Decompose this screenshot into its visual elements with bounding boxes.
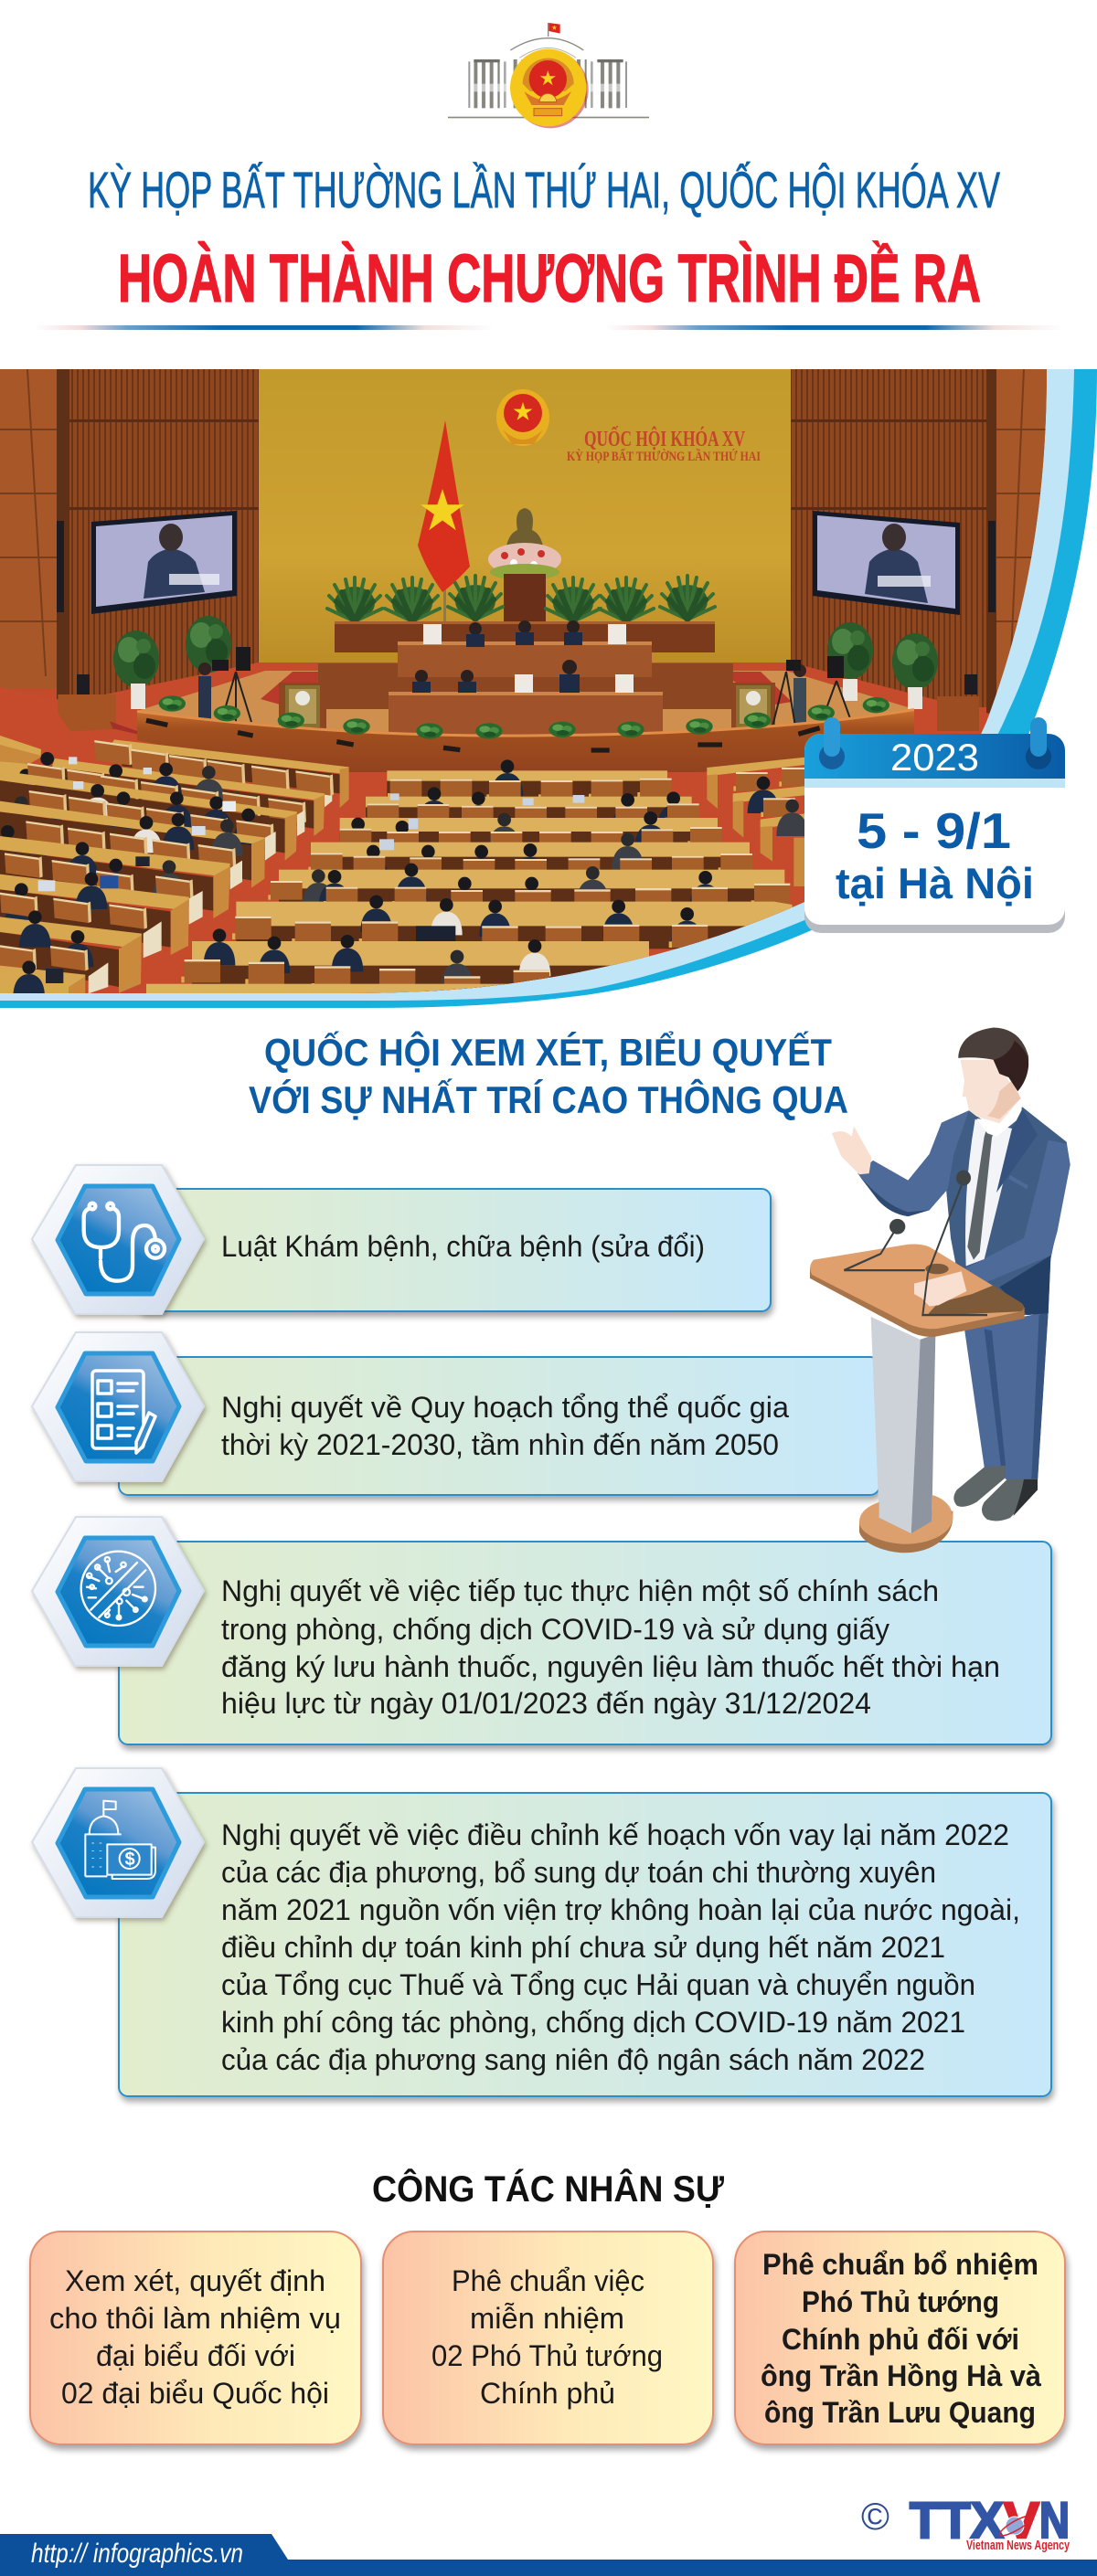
panel: item 1 health law	[32, 1165, 771, 1314]
text: box 2: miễn nhiệm	[470, 2302, 624, 2335]
text: item 2	[221, 1391, 789, 1461]
text: item 4: của Tổng cục Thuế và Tổng cục Hải quan và chuyển nguồn	[221, 1968, 975, 2001]
podium base	[859, 1495, 953, 1553]
footer: website bar	[0, 2534, 1097, 2576]
text: item 4: Nghị quyết về việc điều chỉnh kế hoạch vốn vay lại năm 2022	[221, 1818, 1009, 1851]
heading: National Assembly voted: VỚI SỰ NHẤT TRÍ CAO THÔNG QUA	[249, 1077, 848, 1121]
text: box 1: 02 đại biểu Quốc hội	[61, 2377, 329, 2410]
text: item 2: thời kỳ 2021-2030, tầm nhìn đến năm 2050	[221, 1428, 779, 1461]
text: box 2: Chính phủ	[480, 2377, 615, 2410]
logo: National Assembly building and emblem	[448, 23, 649, 128]
wall panels	[0, 369, 57, 689]
logo: TTXVN Vietnam News Agency: ©	[861, 2495, 889, 2538]
lecterns	[279, 683, 775, 730]
icon: flag on the dome	[548, 23, 560, 37]
icon: stethoscope in hexagon	[32, 1165, 204, 1314]
icon: national emblem	[510, 49, 589, 128]
panel: item 3 COVID-19 resolution	[32, 1517, 1051, 1744]
stage floor	[139, 671, 914, 732]
icon: building and money in hexagon	[32, 1768, 204, 1917]
palms	[327, 576, 715, 621]
illustration: speaker at podium	[810, 1028, 1070, 1553]
panel: personnel box 2	[383, 2231, 713, 2444]
text: box 3: Phó Thủ tướng	[802, 2285, 999, 2318]
text: item 3: trong phòng, chống dịch COVID-19 và sử dụng giấy	[221, 1613, 889, 1646]
calendar rings	[819, 717, 1051, 769]
man's legs and shoes	[953, 1311, 1049, 1521]
text: box 3: Chính phủ đối với	[782, 2323, 1019, 2356]
text: box 3: ông Trần Lưu Quang	[764, 2396, 1036, 2429]
man's raised hand	[832, 1126, 871, 1174]
logo: TTXVN Vietnam News Agency: TTX	[910, 2491, 1004, 2549]
microphones	[844, 1171, 987, 1315]
heading: National Assembly voted: QUỐC HỘI XEM XÉT, BIỂU QUYẾT	[264, 1030, 832, 1074]
text: item 4: năm 2021 nguồn vốn viện trợ không hoàn lại của nước ngoài,	[221, 1893, 1020, 1926]
logo: TTXVN Vietnam News Agency: N	[1039, 2491, 1070, 2549]
text: item 3: hiệu lực từ ngày 01/01/2023 đến ngày 31/12/2024	[221, 1687, 871, 1720]
logo: TTXVN Vietnam News Agency: V	[1004, 2491, 1039, 2549]
text: box 1: đại biểu đối với	[96, 2339, 295, 2372]
right seating block	[707, 757, 814, 886]
text: item 1: Luật Khám bệnh, chữa bệnh (sửa đổi)	[221, 1230, 705, 1263]
screens	[91, 511, 960, 615]
place: tại Hà Nội	[836, 859, 1034, 907]
text: item 4: của các địa phương, bổ sung dự toán chi thường xuyên	[221, 1856, 936, 1889]
photo: National Assembly hall: KỲ HỌP BẤT THƯỜNG LẦN THỨ HAI	[567, 449, 761, 464]
icon: virus prohibited in hexagon	[32, 1517, 204, 1666]
panel: item 2 national master plan	[32, 1332, 879, 1495]
podium top	[810, 1245, 1025, 1337]
text: box 2	[431, 2264, 663, 2410]
text: box 3: ông Trần Hồng Hà và	[761, 2359, 1041, 2392]
panel: curved blue frame around hall photo	[0, 369, 1097, 1008]
calendar header	[804, 734, 1065, 779]
text: item 3: đăng ký lưu hành thuốc, nguyên liệu làm thuốc hết thời hạn	[221, 1650, 1000, 1683]
text: box 2: Phê chuẩn việc	[452, 2264, 644, 2297]
panel: personnel box 3	[735, 2231, 1065, 2444]
plants and vases	[113, 616, 938, 709]
man's torso	[857, 1106, 1070, 1315]
photo: National Assembly hall	[0, 369, 1051, 1009]
text: box 2: 02 Phó Thủ tướng	[431, 2339, 663, 2372]
centre seating block	[146, 759, 793, 1000]
bust and flowers	[488, 508, 561, 621]
panel: item 4 budget resolution	[32, 1768, 1051, 2096]
footer: website bar: http:// infographics.vn	[31, 2539, 243, 2569]
logo: TTXVN Vietnam News Agency	[861, 2491, 1070, 2553]
year: 2023	[890, 736, 979, 779]
heading: personnel work: CÔNG TÁC NHÂN SỰ	[372, 2168, 725, 2210]
text: item 2: Nghị quyết về Quy hoạch tổng thể quốc gia	[221, 1391, 789, 1424]
text: box 1	[49, 2264, 341, 2410]
seating and stage front	[0, 694, 914, 1000]
podium column	[871, 1317, 935, 1533]
man's hand on podium	[914, 1271, 966, 1307]
left seating block	[0, 736, 349, 998]
text: box 1: Xem xét, quyết định	[65, 2264, 325, 2297]
heading: National Assembly voted	[249, 1030, 848, 1121]
text: box 1: cho thôi làm nhiệm vụ	[49, 2302, 341, 2335]
text: item 4: của các địa phương sang niên độ ngân sách năm 2022	[221, 2043, 925, 2076]
carpet	[0, 663, 1051, 1005]
presidium desks	[318, 620, 733, 736]
wall text: QUỐC HỘI KHÓA XV	[584, 427, 745, 451]
wall emblem	[496, 389, 549, 446]
dates: 5 - 9/1	[857, 802, 1011, 859]
text: item 4: điều chỉnh dự toán kinh phí chưa sử dụng hết năm 2021	[221, 1931, 945, 1964]
text: box 3: Phê chuẩn bổ nhiệm	[762, 2248, 1038, 2281]
panel: personnel box 1	[30, 2231, 361, 2444]
flag	[418, 420, 470, 621]
calendar: date and place	[804, 717, 1065, 933]
text: item 4: kinh phí công tác phòng, chống dịch COVID-19 năm 2021	[221, 2006, 965, 2039]
text: item 3	[221, 1574, 1000, 1720]
icon: checklist in hexagon	[32, 1332, 204, 1481]
text: item 4	[221, 1818, 1020, 2076]
man's head	[958, 1028, 1028, 1123]
icon: parliament building	[448, 38, 649, 118]
text: item 3: Nghị quyết về việc tiếp tục thực hiện một số chính sách	[221, 1574, 939, 1607]
cabinets and cameras	[69, 647, 979, 731]
text: box 3	[761, 2248, 1041, 2429]
icon: building and money in hexagon: $	[124, 1850, 135, 1870]
